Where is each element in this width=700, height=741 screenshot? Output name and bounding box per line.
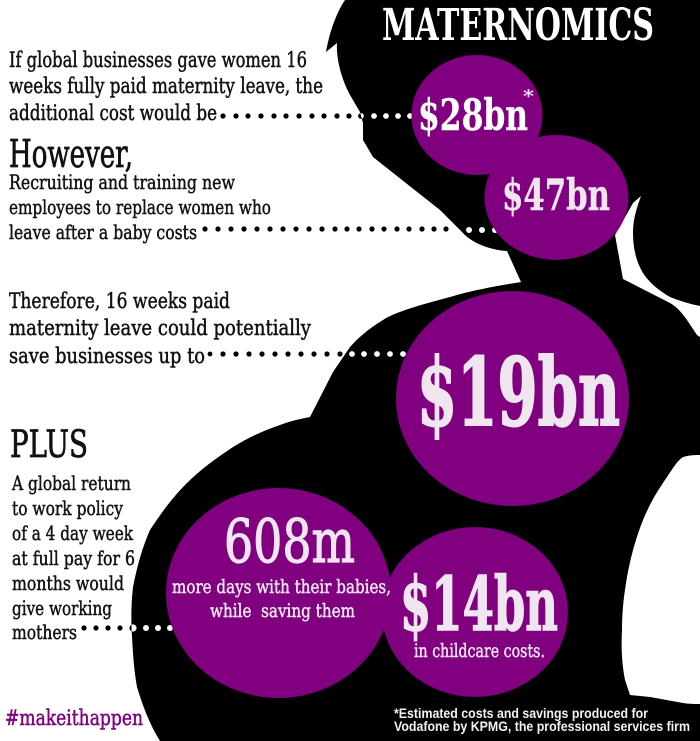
text block: recruiting cost: leave after a baby costs: [9, 220, 197, 244]
figure: 608m with caption: [172, 507, 391, 622]
text block: savings: save businesses up to: [9, 344, 205, 368]
text block: return to work policy: give working: [12, 596, 112, 620]
text block: return to work policy: mothers: [12, 620, 77, 644]
text block: return to work policy: to work policy: [12, 496, 124, 520]
text block: additional cost: additional cost would be: [9, 101, 217, 125]
text block: recruiting cost: Recruiting and training new: [9, 170, 235, 194]
text block: return to work policy: months would: [12, 571, 124, 595]
figure: $47bn: $47bn: [502, 171, 610, 221]
heading: PLUS: PLUS: [10, 423, 88, 466]
text block: additional cost: If global businesses gave women 16: [9, 48, 307, 72]
text block: savings: Therefore, 16 weeks paid: [9, 289, 230, 313]
figure: $28bn: $28bn: [418, 91, 528, 141]
text block: savings: maternity leave could potentially: [9, 316, 311, 340]
text block: return to work policy: of a 4 day week: [12, 521, 134, 545]
dotted leader lines: [81, 113, 498, 632]
caption: while saving: while saving them: [210, 600, 355, 622]
figure: $14bn with caption: $14bn: [400, 562, 558, 648]
text block: savings: [9, 289, 311, 368]
text block: return to work policy: [11, 471, 135, 644]
text block: additional cost: [9, 48, 323, 125]
text block: return to work policy: at full pay for 6: [12, 546, 135, 570]
asterisk: *: [523, 86, 535, 107]
hashtag: #makeithappen: [5, 706, 143, 730]
figure: 608m with caption: 608m: [224, 507, 355, 577]
text block: additional cost: weeks fully paid maternity leave, the: [9, 74, 323, 98]
text block: recruiting cost: [9, 170, 271, 244]
caption: childcare costs: in childcare costs.: [414, 640, 545, 662]
circle: $28bn: [412, 55, 542, 175]
footnote: *Estimated costs and savings produced for: [394, 705, 648, 721]
caption: more days: more days with their babies,: [172, 576, 391, 598]
heading: However: However,: [9, 132, 133, 176]
text block: return to work policy: A global return: [11, 471, 131, 495]
footnote: [394, 705, 690, 734]
circle: $47bn: [484, 135, 628, 260]
circle: 608m: [166, 488, 391, 698]
circle: $19bn: [396, 291, 629, 506]
text block: recruiting cost: employees to replace women who: [9, 195, 271, 219]
circle: $14bn: [382, 527, 568, 697]
figure: $14bn with caption: [400, 562, 558, 662]
